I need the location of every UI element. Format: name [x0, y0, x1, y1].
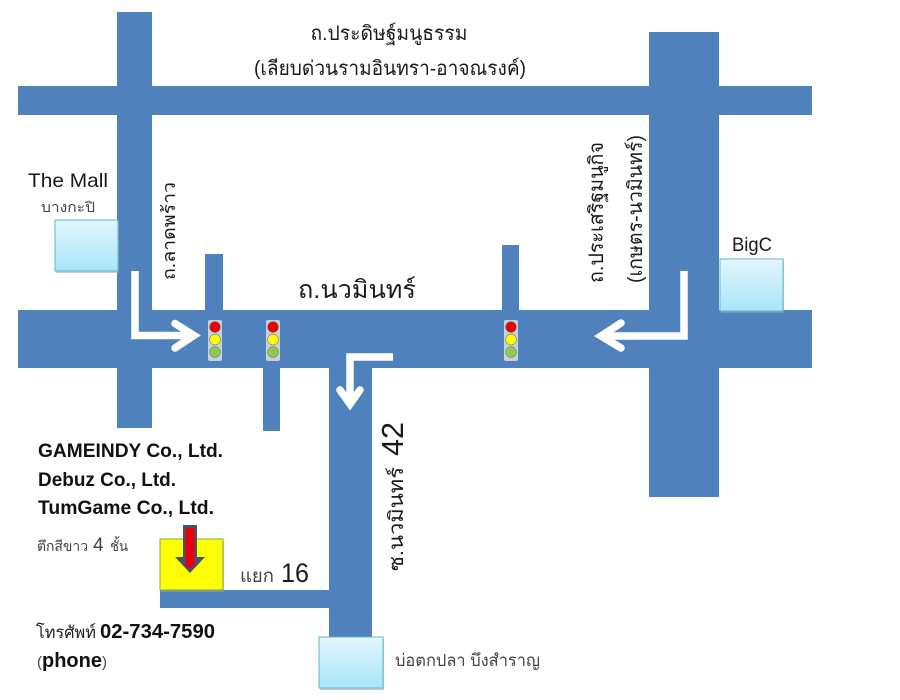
main road label: ถ.นวมินทร์	[298, 276, 416, 304]
phone: (phone)	[37, 650, 107, 672]
company names: Debuz Co., Ltd.	[38, 470, 176, 491]
traffic light 3	[504, 320, 518, 361]
The Mall label: The Mall	[28, 170, 108, 192]
building note: 4	[93, 535, 104, 556]
company names: TumGame Co., Ltd.	[38, 498, 214, 519]
BigC label: BigC	[732, 234, 772, 256]
Prasert road label: (เกษตร-นวมินทร์)	[624, 135, 647, 283]
arrow: from BigC	[601, 271, 684, 348]
junction label: 16	[281, 558, 309, 588]
Prasert road label: ถ.ประเสริฐมนูกิจ	[586, 142, 609, 283]
building: pond	[319, 637, 384, 690]
traffic light 1	[208, 320, 222, 361]
company names	[38, 441, 223, 519]
phone	[36, 621, 215, 672]
junction label: แยก	[240, 566, 274, 587]
junction label	[240, 558, 309, 588]
top road label	[254, 22, 526, 80]
traffic light 2	[266, 320, 280, 361]
soi label: ซ.นวมินทร์	[385, 467, 408, 571]
arrow: company location	[175, 525, 205, 573]
building: BigC	[720, 259, 784, 313]
top road label: (เลียบด่วนรามอินทรา-อาจณรงค์)	[254, 57, 526, 80]
road network	[18, 12, 812, 638]
phone: 02-734-7590	[100, 621, 215, 643]
arrow: into soi	[340, 357, 393, 404]
phone: โทรศัพท์	[36, 622, 96, 642]
arrow: from The Mall	[135, 271, 194, 348]
building note: ตึกสีขาว	[37, 538, 88, 554]
top road label: ถ.ประดิษฐ์มนูธรรม	[310, 22, 468, 46]
building: company	[160, 539, 224, 592]
soi number: 42	[375, 422, 410, 456]
company names: GAMEINDY Co., Ltd.	[38, 441, 223, 462]
Lat Phrao road label: ถ.ลาดพร้าว	[159, 182, 179, 280]
building note: ชั้น	[110, 536, 128, 554]
The Mall label	[28, 170, 108, 215]
building: The Mall	[55, 220, 119, 273]
Prasert road label	[586, 135, 647, 283]
pond label: บ่อตกปลา บึงสำราญ	[395, 651, 540, 670]
building note	[37, 535, 128, 556]
The Mall label: บางกะปิ	[41, 199, 95, 215]
